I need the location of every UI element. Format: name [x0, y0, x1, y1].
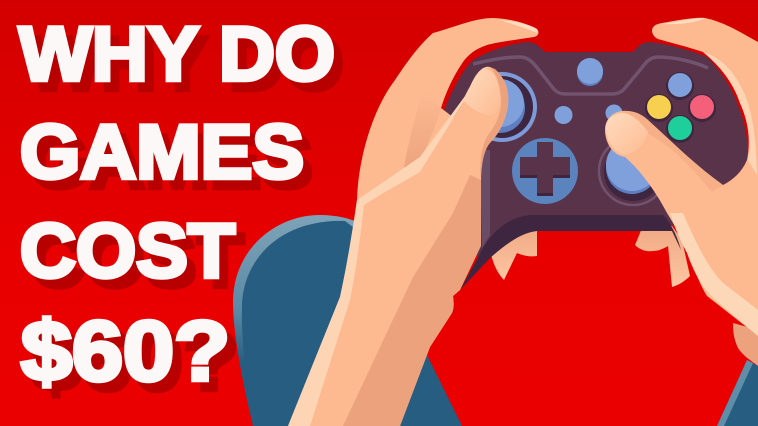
controller bottom dark band [460, 215, 681, 290]
fingertips under controller: right [635, 226, 690, 287]
right thumb nail [606, 113, 648, 155]
face buttons [645, 72, 716, 143]
title text: GAMES [20, 110, 304, 195]
left thumb side shade [480, 67, 508, 180]
fingertips under controller: left [490, 226, 537, 280]
title text: $60? [21, 304, 230, 398]
title shadow: $60? [30, 314, 239, 408]
left arm and hand [288, 18, 538, 426]
right thumb shade [622, 111, 723, 192]
left arm shade [343, 135, 490, 426]
button: red [688, 94, 716, 122]
small left button [554, 106, 572, 124]
left fingertip highlight [500, 20, 538, 33]
title shadow: COST [29, 219, 244, 304]
right arm lower shade [733, 323, 758, 366]
button: green [666, 115, 694, 143]
chair: left backrest [233, 215, 462, 426]
small right button [606, 104, 622, 122]
left stick [467, 72, 537, 142]
left thumb nail [463, 69, 500, 116]
button: yellow [645, 94, 673, 122]
right fingertip highlight [662, 18, 705, 24]
controller [437, 42, 748, 290]
controller body [437, 42, 748, 262]
right wrist highlight [670, 213, 758, 336]
title text: COST [20, 209, 235, 294]
right index finger and palm [605, 18, 758, 336]
controller top contour line [473, 57, 708, 94]
title text: WHY DO [19, 12, 335, 97]
right finger highlight [703, 52, 757, 175]
title [19, 12, 344, 408]
d-pad [512, 138, 578, 204]
left arm highlight strip [288, 67, 490, 426]
chair: right backrest [717, 360, 758, 426]
left thumb [420, 67, 508, 180]
button: blue [666, 72, 694, 100]
title shadow: GAMES [29, 120, 313, 205]
title shadow: WHY DO [28, 22, 344, 107]
top centre button [577, 58, 603, 86]
left hand silhouette [288, 18, 538, 426]
left palm shade [403, 90, 441, 172]
controller lower-left highlight [480, 150, 490, 248]
title text [19, 12, 335, 398]
title shadow [28, 22, 344, 408]
right hand [605, 18, 758, 336]
right stick [599, 137, 667, 205]
